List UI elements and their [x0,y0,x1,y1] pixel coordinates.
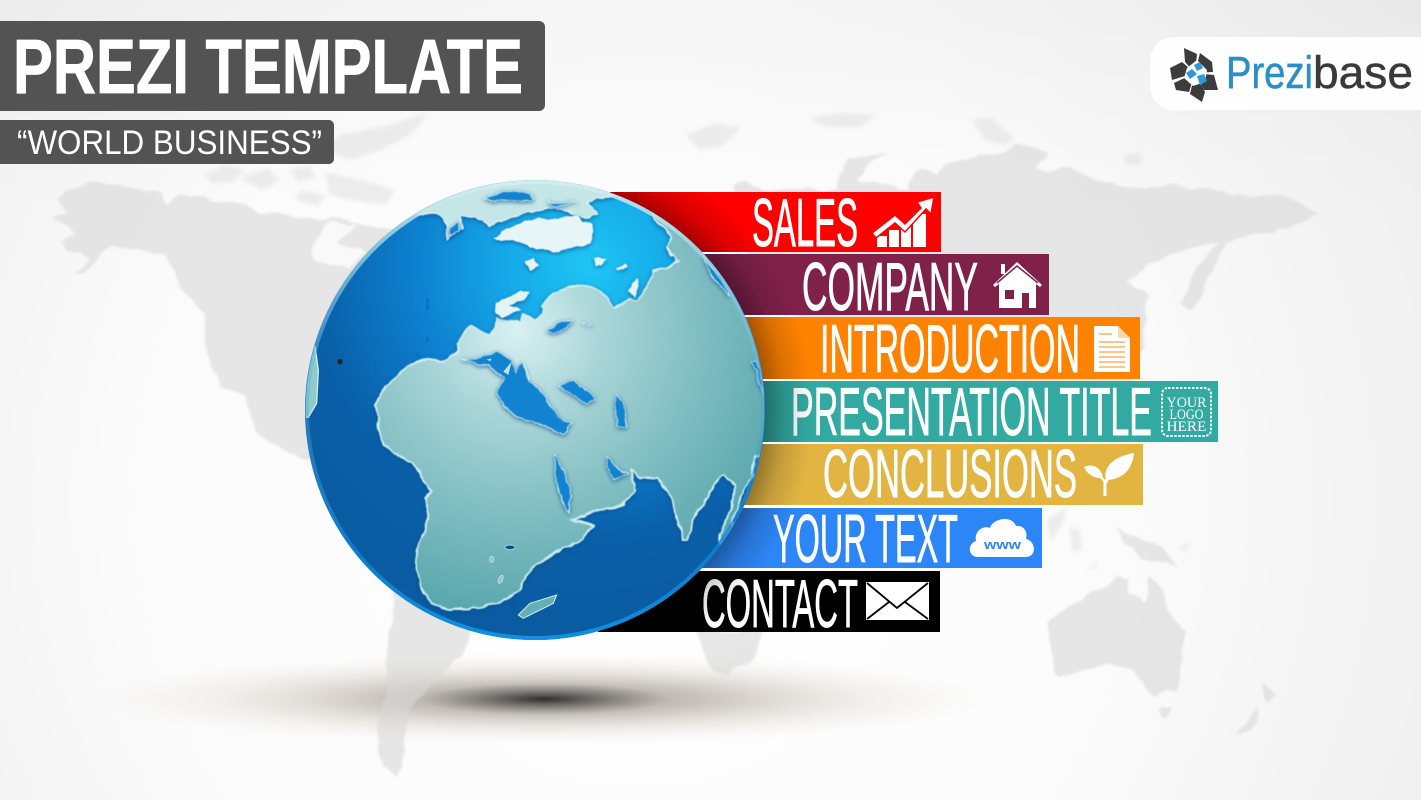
globe rim highlight [307,182,763,638]
subtitle banner: “WORLD BUSINESS” [17,124,322,162]
bar: your text: YOUR TEXT [773,501,958,577]
bar: company: COMPANY [802,249,978,325]
logo: Prezibase badge: base [1313,47,1413,98]
land: northern cap [415,180,616,242]
sea: Baltic [548,320,593,333]
bar: sales: SALES [752,185,858,261]
icon: cloud: www [983,537,1022,552]
icon: sprout [1084,453,1134,496]
bar: conclusions: CONCLUSIONS [823,436,1077,512]
globe shadow falling on bars [610,192,806,620]
icon: envelope [866,582,929,620]
map: Tasmania [1160,707,1172,717]
title banner: PREZI TEMPLATE [13,24,523,110]
bar: your text [680,501,1042,577]
bar: conclusions [730,436,1143,512]
logo: Prezibase badge [1150,37,1421,110]
sea: Red Sea [556,453,569,513]
globe ocean [305,180,765,640]
icon: logo placeholder: LOGO [1170,407,1204,423]
sea: Mediterranean [461,352,572,435]
map: New Zealand [1238,680,1277,733]
bar: sales [610,185,941,261]
sea: Persian Gulf [607,457,627,479]
land: Italy and Mediterranean islands [487,359,531,380]
bar: company [680,249,1049,325]
land: southern island [518,595,557,618]
panel: coloured menu bars [598,185,1218,642]
land: Europe, Asia and Africa [375,212,790,610]
icon: logo placeholder: HERE [1166,419,1206,435]
map: Eurasia [730,143,1317,400]
logo: Prezibase badge: Prezi [1226,47,1313,98]
icon: house [993,262,1042,308]
bar: contact [598,566,940,642]
map: faint arctic and island fragments [205,112,1190,570]
map: South America [378,540,480,777]
icon: cloud [970,519,1034,557]
map: New Guinea [1113,530,1177,568]
icon: logo placeholder [1162,388,1211,436]
bar: introduction [720,311,1140,387]
background world map [53,143,1317,777]
icon: logo placeholder: YOUR [1166,395,1206,411]
sea: Caspian [617,395,626,427]
ground shadow under globe [94,653,994,745]
land: left rim sliver [306,346,319,418]
map: Australia [1048,575,1188,695]
illustration: globe [300,167,790,640]
map: Hudson Bay gap [310,222,367,270]
bar: introduction: INTRODUCTION [820,311,1080,387]
bar: contact: CONTACT [702,566,858,642]
land: small islands [497,248,673,317]
lakes and atlantic islands [337,298,515,584]
globe landmasses [300,167,790,618]
icon: Prezibase star [1170,48,1218,102]
icon: rising chart [872,197,934,247]
sea: rim waters [703,253,767,400]
icon: document [1094,326,1130,372]
map: North America [53,185,500,462]
map: Africa lower tip [697,630,761,673]
sea: Black Sea [560,378,595,405]
land: large northern island [497,215,592,252]
bar: presentation title [740,374,1218,450]
sea: arctic bays [448,190,577,235]
seas on the landmass [448,190,767,513]
